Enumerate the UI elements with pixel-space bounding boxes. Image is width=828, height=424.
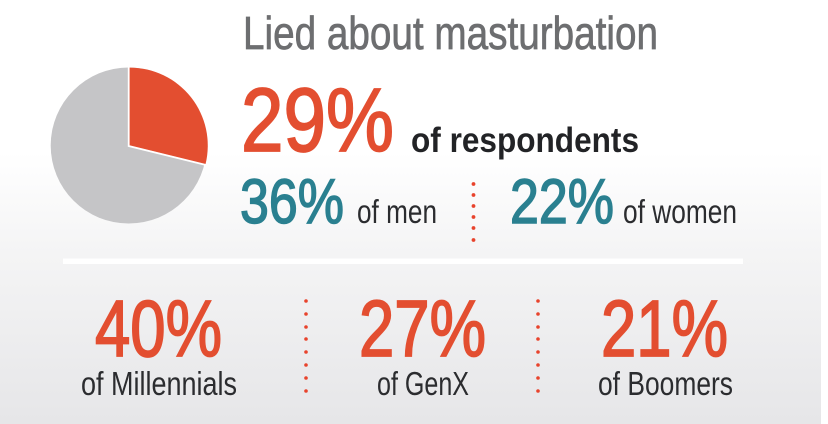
dotted divider: Millennials and GenX: [304, 299, 308, 393]
Boomers statistic: 21%: [601, 284, 728, 373]
pie chart: 29 percent: [51, 66, 208, 224]
men statistic: [240, 167, 437, 237]
dotted divider: men and women: [472, 182, 475, 242]
men statistic: 36%: [240, 167, 344, 237]
headline figure: 29%: [241, 71, 394, 171]
headline label: of respondents: [411, 121, 639, 160]
Boomers statistic: [598, 284, 733, 402]
dotted divider: GenX and Boomers: [536, 299, 540, 393]
women statistic: 22%: [510, 167, 614, 237]
Boomers statistic: of Boomers: [598, 365, 733, 402]
title: Lied about masturbation: [243, 7, 658, 59]
GenX statistic: of GenX: [377, 365, 469, 402]
GenX statistic: 27%: [359, 284, 486, 373]
women statistic: [510, 167, 737, 237]
Millennials statistic: 40%: [95, 284, 222, 373]
Millennials statistic: [81, 284, 237, 402]
GenX statistic: [359, 284, 486, 402]
women statistic: of women: [623, 193, 737, 230]
Millennials statistic: of Millennials: [81, 365, 237, 402]
men statistic: of men: [357, 193, 437, 230]
